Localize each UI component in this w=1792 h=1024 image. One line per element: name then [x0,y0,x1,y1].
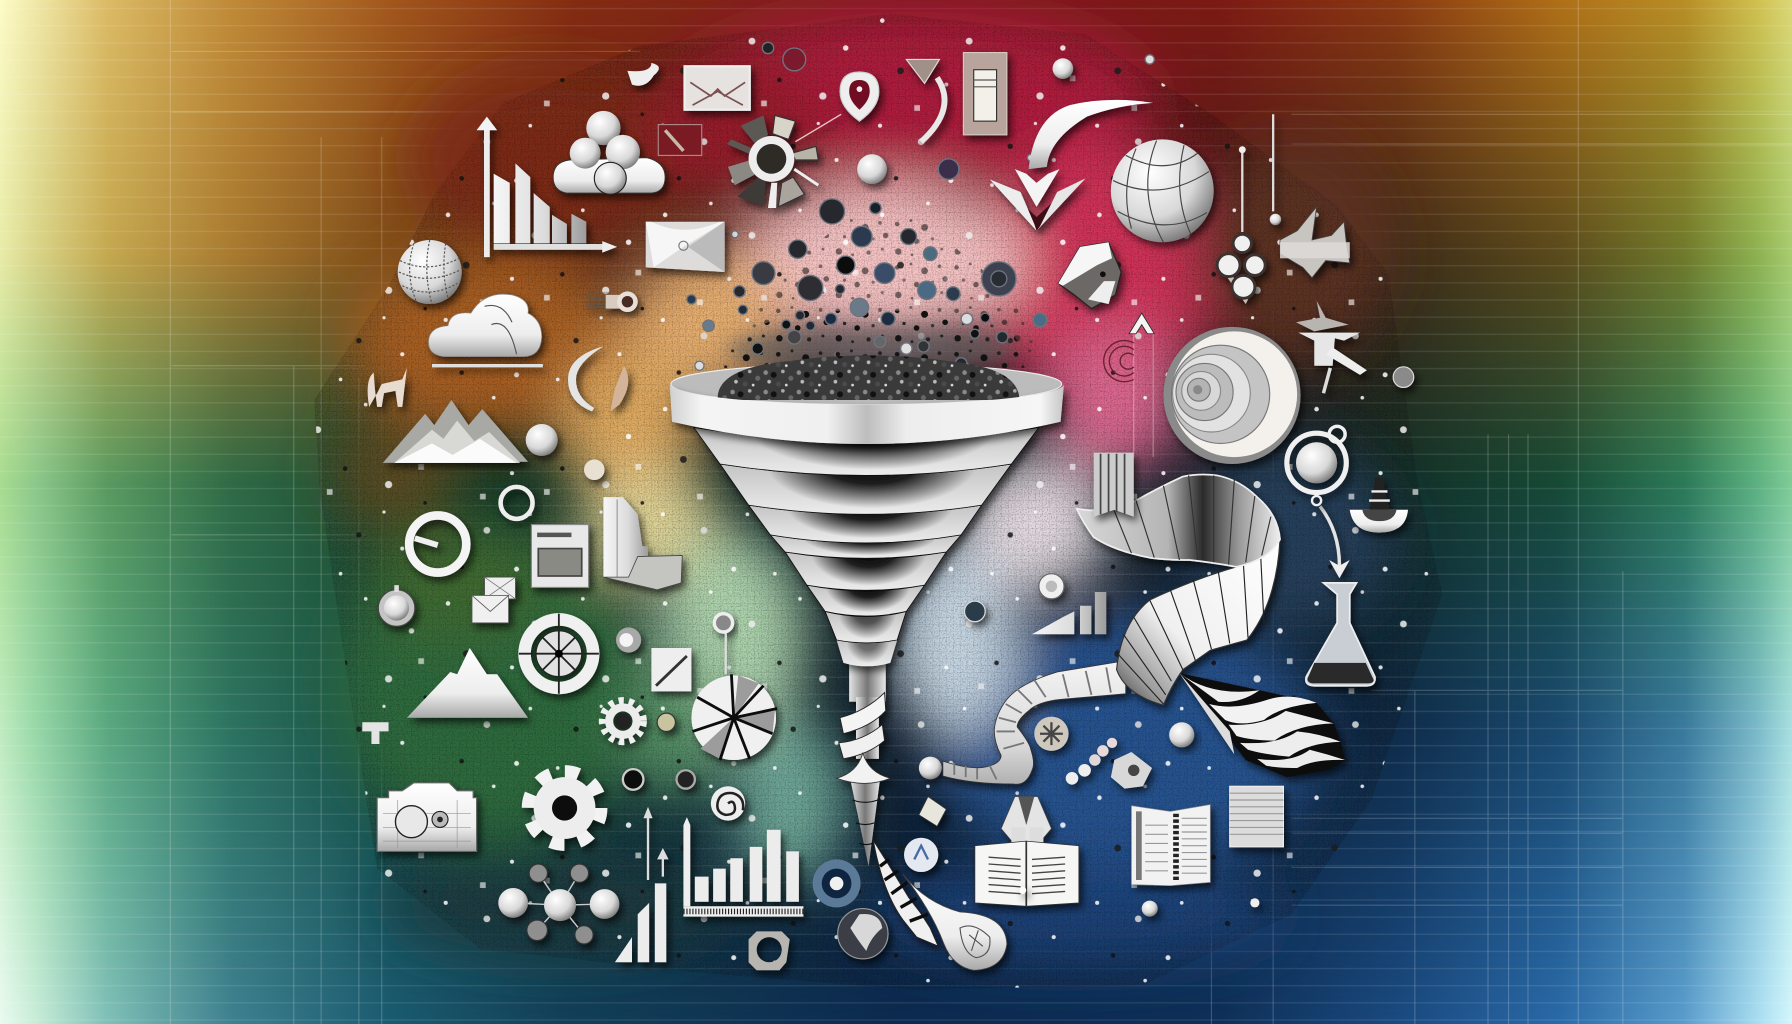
icon: ring with tick [409,515,466,573]
icon: bar chart bottom [683,817,803,917]
icon: ball on stem [714,614,733,674]
ribbon lower sweep [1117,539,1280,705]
particle cloud above the funnel [687,42,1154,373]
icon: spiral disc [1163,327,1301,464]
icon: tall bars with arrows [615,807,669,962]
icon: cloud of spheres [553,111,665,194]
icon: molecule [498,864,619,944]
icon: ball knob [616,627,641,653]
icon: panel device [963,53,1007,135]
icon: small spiral [711,786,745,821]
icon: standing book [1131,805,1210,886]
icon: funnel [670,355,1064,866]
funnel mouth and pebbles [671,355,1062,405]
icon: triangle peak [407,648,528,718]
icon: curved down arrow [990,100,1153,231]
icon: page stack [1230,786,1283,847]
icon: up arrow chevron [1129,313,1154,457]
icon: envelope top [685,66,750,110]
icon: small pen shape [919,797,946,826]
funnel rim [670,384,1064,444]
icon: small spheres and rings [584,58,1414,917]
icon: concentric arcs [1104,341,1134,382]
icon: dark globe [838,909,888,959]
funnel tiers [694,427,1039,666]
icon: mesh sphere left [398,240,462,304]
icon: target ring [813,859,861,907]
icon: crumpled shape [1058,242,1121,309]
icon: watch ring [378,585,415,626]
icon: fan dial [727,114,841,208]
icon: crescent ring [568,346,628,411]
icon: segmented dial [519,614,599,694]
icon: striped block [1094,453,1134,517]
icon: folded shape [1280,207,1350,278]
ribbon wide mouth [1077,475,1280,567]
icon: small square note [651,648,691,691]
icon: oven window [531,525,589,587]
funnel spike [837,753,890,866]
icon: envelope left [646,222,725,272]
icon: light bulb [840,72,879,121]
icon: rising bar chart top left [477,117,617,257]
icon: angled building [603,497,682,590]
icon: open book [975,797,1079,906]
icon: small globe [904,838,938,872]
icon: pencil frame [658,125,702,155]
icon: horse silhouette [368,368,407,407]
icon: bowl on stand [1350,478,1408,533]
icon: stacked envelopes [472,577,515,623]
icon: mini lens [586,291,638,312]
icon: flask [1306,583,1375,686]
icon: small sphere [857,154,887,184]
ribbon thin tail [919,661,1126,784]
icon: arrow to flask [1320,506,1350,578]
icon: twisted horn ribbon [919,475,1280,784]
icon: camera [377,783,477,851]
icon: letter T block [362,722,389,744]
icon: ring with sphere [1287,426,1346,505]
icon: ringed dots [623,713,695,790]
central colour splash [310,0,1442,990]
icon: mountains [383,400,558,463]
icon: metal ball [1169,722,1194,747]
icon: cloud left [428,294,543,366]
icon: round cog and beads [1034,717,1152,789]
icon: hex ring [749,931,790,970]
icon: crossed shards [1296,301,1367,393]
icon: faceted globe [1111,139,1214,242]
icon: comet with zebra tail [873,840,1007,970]
icon: triangle and arc [906,59,945,142]
icon: small bars mid right [1032,592,1106,634]
icon: flag waves [1179,673,1345,777]
icon: small bird [627,63,659,86]
funnel stem and swirl [839,661,886,759]
icon: pie wheel [691,674,777,760]
icon: small ring [501,487,533,519]
icon: clover node [1217,114,1281,304]
icon: large gear [529,773,600,843]
icon: small gear [602,701,643,742]
